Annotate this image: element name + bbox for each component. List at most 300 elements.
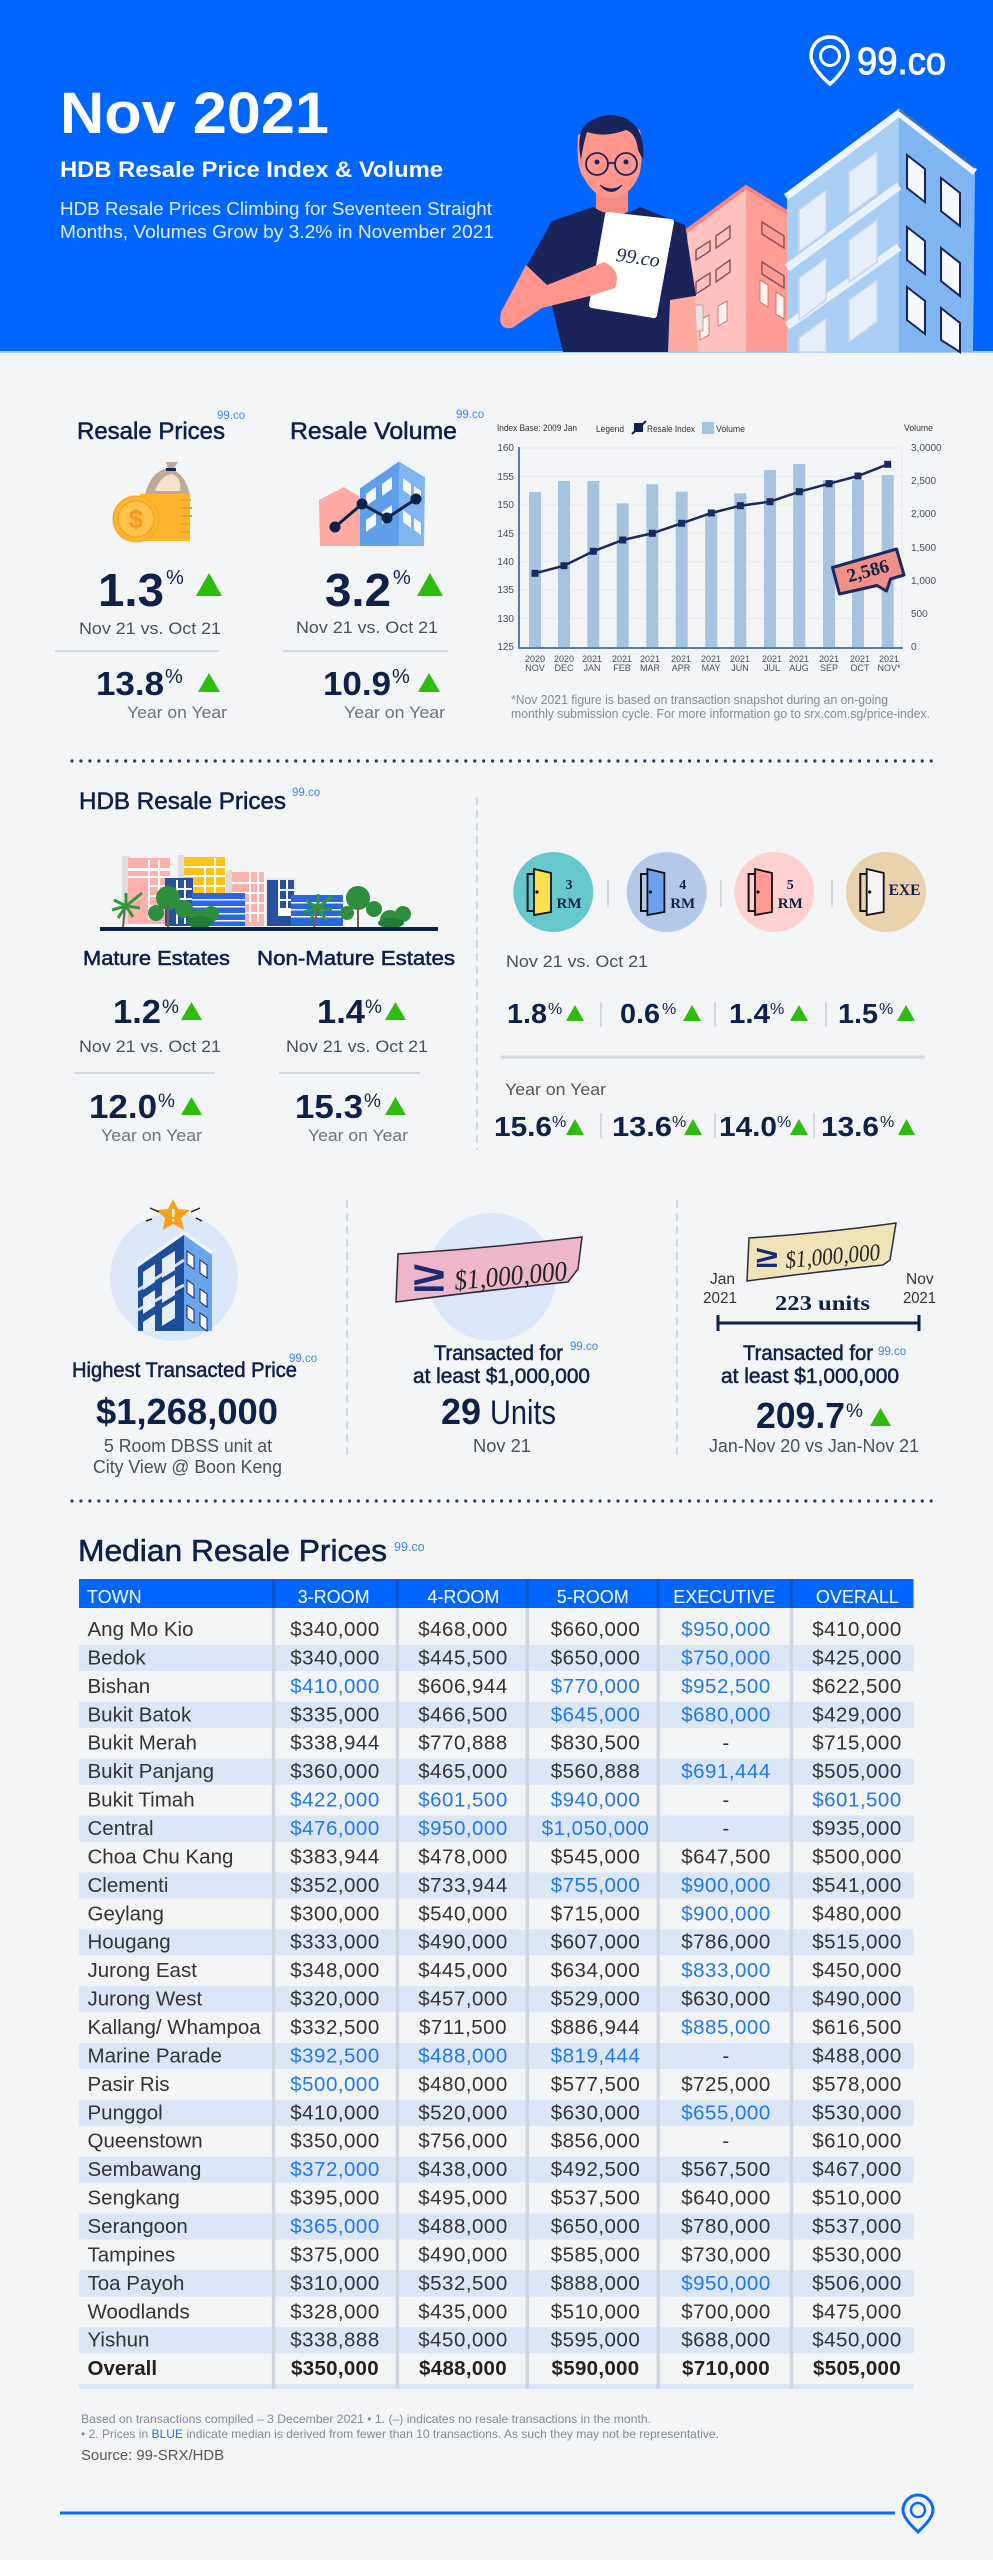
left axis labels: 130 [497, 614, 514, 625]
source: Source: 99-SRX/HDB [81, 2448, 224, 2464]
month labels: 2021 [582, 654, 602, 664]
stat: non-mature 15.3%: 15.3 [295, 1088, 363, 1125]
row: Bukit Panjang [88, 1760, 902, 1783]
row: Kallang/ Whampoa: $616,500 [812, 2016, 902, 2039]
label: 223 units: 223 units [775, 1291, 870, 1315]
row: Sengkang: $640,000 [681, 2187, 771, 2210]
stat: mature 1.2%: % [162, 997, 179, 1018]
watermark tag: 99.co [217, 410, 245, 422]
description: Months, Volumes Grow by 3.2% in November 2021 [60, 221, 494, 242]
row: Bedok: Bedok [88, 1646, 146, 1669]
row: Jurong West: $529,000 [551, 1988, 640, 2011]
panel: flat type price change [494, 852, 926, 1142]
icon: 5 room door [734, 852, 814, 932]
row: Bedok [88, 1646, 902, 1669]
icon: 4 room door: RM [670, 896, 695, 912]
row: Queenstown: Queenstown [88, 2130, 203, 2153]
heading [721, 1342, 899, 1388]
row: Geylang: $300,000 [290, 1902, 380, 1925]
left axis labels: 125 [497, 642, 514, 653]
month labels: JUN [731, 663, 749, 673]
row: Bedok: $750,000 [681, 1646, 771, 1669]
row: Hougang: $490,000 [418, 1931, 508, 1954]
row: Choa Chu Kang: $478,000 [418, 1845, 508, 1868]
row: Marine Parade: - [722, 2044, 730, 2068]
row: Overall: $350,000 [291, 2357, 379, 2380]
icon: 3 room door [513, 852, 593, 932]
row: Bishan: $770,000 [551, 1675, 640, 1698]
stats: year on year by flat type: 13.6 [821, 1111, 879, 1142]
month labels: 2021 [762, 654, 782, 664]
row: Overall: $590,000 [552, 2357, 639, 2380]
row: Bishan: $952,500 [681, 1675, 771, 1698]
row: Woodlands: $510,000 [551, 2300, 640, 2323]
month labels: NOV* [877, 663, 901, 673]
icon: 3 room door: RM [556, 896, 582, 912]
row: Serangoon: $780,000 [681, 2215, 771, 2238]
watermark tag: 99.co [292, 787, 320, 799]
row: Central: $1,050,000 [542, 1817, 649, 1840]
stat: 10.9% year on year: % [392, 666, 410, 688]
row: Ang Mo Kio: $410,000 [812, 1618, 902, 1641]
illustration: housing estate skyline [100, 855, 438, 931]
row: Yishun: $338,888 [290, 2329, 380, 2352]
chart legend [497, 421, 933, 435]
stats: year on year by flat type: % [672, 1114, 686, 1131]
description: 5 Room DBSS unit at [104, 1436, 272, 1456]
date labels: Jan [710, 1271, 735, 1288]
logo: 99.co [811, 37, 946, 84]
row: Bukit Panjang: $691,444 [681, 1760, 771, 1783]
row: Hougang: $607,000 [551, 1931, 640, 1954]
row: Clementi [88, 1874, 902, 1897]
chart: resale index and volume [497, 421, 942, 721]
row: Queenstown: $856,000 [551, 2130, 640, 2153]
row: Bedok: $445,500 [418, 1646, 508, 1669]
row: Tampines: $730,000 [681, 2244, 771, 2266]
stat: 29 units: Units [490, 1394, 556, 1432]
row: Sembawang: $438,000 [418, 2158, 508, 2181]
row: Bedok: $425,000 [812, 1646, 902, 1669]
row: Overall: $710,000 [682, 2357, 770, 2380]
table header: 3-ROOM [298, 1587, 370, 1607]
caption: Nov 21 vs. Oct 21 [286, 1037, 428, 1056]
row: Kallang/ Whampoa: $711,500 [419, 2016, 507, 2039]
row: Marine Parade: $488,000 [418, 2044, 508, 2068]
row: Geylang [88, 1902, 902, 1925]
table row bands [79, 1645, 914, 2389]
row: Choa Chu Kang: $383,944 [290, 1845, 380, 1868]
row: Toa Payoh: $888,000 [551, 2272, 640, 2295]
row: Yishun: $450,000 [812, 2329, 902, 2352]
stat: 1.3% month on month: 1.3 [98, 564, 164, 616]
table header: 5-ROOM [557, 1587, 629, 1607]
row: Queenstown: $610,000 [812, 2130, 902, 2153]
row: Overall [88, 2357, 901, 2380]
row: Ang Mo Kio: $660,000 [551, 1618, 640, 1641]
row: Woodlands: $475,000 [812, 2300, 902, 2323]
row: Geylang: $900,000 [681, 1902, 771, 1925]
month labels: 2021 [701, 654, 721, 664]
stat: non-mature 15.3% [295, 1088, 406, 1125]
subtitle: HDB Resale Price Index & Volume [60, 157, 443, 182]
row: Marine Parade: $488,000 [812, 2044, 902, 2068]
row: Yishun: Yishun [88, 2329, 149, 2352]
description: HDB Resale Prices Climbing for Seventeen Straight [60, 198, 492, 219]
footnotes: • 2. Prices in BLUE indicate median is derived from fewer than 10 transactions. As such they may not be representative. [81, 2427, 719, 2441]
callout: 2,586: 2,586 [845, 556, 891, 587]
stat: 13.8% year on year: % [165, 666, 183, 688]
stat: 209.7%: % [846, 1401, 863, 1422]
right axis labels: 2,500 [911, 476, 936, 487]
row: Geylang: $480,000 [812, 1902, 902, 1925]
row: Toa Payoh: $950,000 [681, 2272, 771, 2295]
row: Serangoon: $537,000 [812, 2215, 902, 2238]
icon: 5 room door: 5 [787, 878, 794, 893]
row: Choa Chu Kang: Choa Chu Kang [88, 1845, 233, 1868]
row: Tampines [88, 2244, 902, 2266]
right axis labels [911, 443, 942, 653]
stat: 3.2% month on month: 3.2 [325, 564, 391, 616]
caption: Nov 21 vs. Oct 21 [296, 618, 438, 637]
row: Yishun: $450,000 [418, 2329, 508, 2352]
month labels: MAY [702, 663, 720, 673]
row: Toa Payoh: Toa Payoh [88, 2272, 184, 2295]
icon: building with star [110, 1199, 238, 1341]
stats: year on year by flat type: % [777, 1114, 791, 1131]
stat: mature 1.2%: 1.2 [113, 993, 161, 1030]
row: Bishan: $606,944 [418, 1675, 508, 1698]
row: Bukit Batok [88, 1703, 902, 1726]
row: Punggol: $530,000 [812, 2101, 902, 2124]
row: Clementi: $733,944 [418, 1874, 508, 1897]
chart footnote: *Nov 2021 figure is based on transaction snapshot during an on-going [511, 693, 888, 707]
stats: month on month by flat type: % [548, 1001, 562, 1018]
row: Bukit Panjang: $360,000 [290, 1760, 380, 1783]
row: Bukit Timah: - [722, 1789, 730, 1812]
row: Clementi: $541,000 [812, 1874, 902, 1897]
row: Bukit Batok: $466,500 [418, 1703, 508, 1726]
date labels: Nov [906, 1271, 934, 1288]
row: Geylang: Geylang [88, 1902, 164, 1925]
left axis labels: 135 [497, 585, 514, 596]
icon: 4 room door [627, 852, 707, 932]
row: Jurong East: Jurong East [88, 1959, 197, 1982]
row: Serangoon: $488,000 [418, 2215, 508, 2238]
caption: Nov 21 vs. Oct 21 [506, 952, 648, 971]
row: Clementi: Clementi [88, 1874, 168, 1897]
stats: year on year by flat type: % [552, 1114, 566, 1131]
chart footnote [511, 693, 930, 721]
stat: 3.2% month on month [325, 564, 443, 616]
row: Bukit Merah [88, 1732, 902, 1755]
stats: year on year by flat type: 15.6 [494, 1111, 552, 1142]
row: Hougang: $333,000 [290, 1931, 380, 1954]
stat: 209.7% [756, 1395, 891, 1436]
heading: Median Resale Prices [78, 1533, 387, 1568]
label: non-mature estates: Non-Mature Estates [257, 948, 455, 970]
header banner [0, 0, 993, 353]
right axis labels: 3,0000 [911, 443, 942, 454]
row: Ang Mo Kio [88, 1618, 902, 1641]
table header: 4-ROOM [427, 1587, 499, 1607]
icon: executive door: EXE [889, 882, 920, 899]
title: Nov 2021 [60, 81, 329, 146]
row: Jurong East: $634,000 [551, 1959, 640, 1982]
row: Kallang/ Whampoa [88, 2016, 902, 2039]
row: Sengkang: $537,500 [551, 2187, 640, 2210]
row: Jurong East [88, 1959, 902, 1982]
row: Jurong West: $457,000 [418, 1988, 508, 2011]
stat: 13.8% year on year [96, 665, 220, 702]
date labels: 2021 [903, 1290, 936, 1307]
footnotes: Based on transactions compiled – 3 December 2021 • 1. (–) indicates no resale transactions in the month. [81, 2412, 651, 2426]
row: Bishan: Bishan [88, 1675, 150, 1698]
description: City View @ Boon Keng [93, 1457, 282, 1477]
watermark tag: 99.co [456, 409, 484, 421]
panel: highest transacted price [72, 1199, 317, 1477]
right axis labels: 1,000 [911, 576, 936, 587]
month labels: 2021 [879, 654, 899, 664]
row: Woodlands: $435,000 [418, 2300, 508, 2323]
row: Jurong West [88, 1988, 902, 2011]
row: Central: $950,000 [418, 1817, 508, 1840]
right axis labels: 1,500 [911, 543, 936, 554]
label: mature estates: Mature Estates [83, 948, 230, 970]
stats: month on month by flat type [507, 998, 915, 1029]
heading: Transacted for [743, 1342, 873, 1365]
row: Bukit Merah: $715,000 [812, 1732, 902, 1755]
row: Serangoon [88, 2215, 902, 2238]
row: Jurong East: $833,000 [681, 1959, 771, 1982]
stats: month on month by flat type: % [770, 1001, 784, 1018]
row: Ang Mo Kio: $950,000 [681, 1618, 771, 1641]
row: Yishun [88, 2329, 902, 2352]
stat: non-mature 1.4% [317, 993, 406, 1030]
chart footnote: monthly submission cycle. For more information go to srx.com.sg/price-index. [511, 707, 930, 721]
icon: pink price banner: ≥ [413, 1253, 445, 1300]
month labels: DEC [554, 663, 574, 673]
month labels: JUL [764, 663, 780, 673]
row: Jurong West: $320,000 [290, 1988, 380, 2011]
date labels [703, 1271, 936, 1307]
row: Bukit Batok: $335,000 [290, 1703, 380, 1726]
row: Bishan: $622,500 [812, 1675, 902, 1698]
row: Sengkang: $510,000 [812, 2187, 902, 2210]
caption: Year on Year [127, 703, 227, 722]
stat: 209.7%: 209.7 [756, 1395, 845, 1436]
illustration: man holding tablet: 99.co [615, 244, 661, 272]
row: Overall: $488,000 [419, 2357, 507, 2380]
row: Woodlands [88, 2300, 902, 2323]
row: Kallang/ Whampoa: $886,944 [551, 2016, 640, 2039]
row: Punggol [88, 2101, 902, 2124]
heading: Transacted for [434, 1342, 563, 1365]
illustration: pink building [685, 187, 790, 352]
row: Sembawang: Sembawang [88, 2158, 201, 2181]
row: Yishun: $688,000 [681, 2329, 771, 2352]
stat: 29 units: 29 [441, 1391, 481, 1432]
heading: HDB Resale Prices [79, 788, 286, 815]
stats: month on month by flat type: 1.5 [838, 998, 878, 1029]
icon: yellow price banner: $1,000,000 [784, 1240, 881, 1274]
row: Clementi: $352,000 [290, 1874, 380, 1897]
left axis labels: 155 [497, 472, 514, 483]
stats: year on year by flat type [494, 1111, 915, 1142]
stat: mature 1.2% [113, 993, 202, 1030]
right axis labels: 500 [911, 609, 928, 620]
row: Overall: $505,000 [813, 2357, 901, 2380]
caption: Year on Year [101, 1126, 202, 1145]
row: Pasir Ris: Pasir Ris [88, 2073, 170, 2096]
row: Pasir Ris: $500,000 [290, 2073, 380, 2096]
row: Pasir Ris: $725,000 [681, 2073, 771, 2096]
stat: 10.9% year on year: 10.9 [323, 665, 391, 702]
row: Jurong West: Jurong West [88, 1988, 203, 2011]
row: Jurong West: $630,000 [681, 1988, 771, 2011]
stat: mature 12.0% [89, 1088, 202, 1125]
row: Sengkang [88, 2187, 902, 2210]
row: Marine Parade: $392,500 [290, 2044, 380, 2068]
month labels: AUG [789, 663, 809, 673]
row: Geylang: $540,000 [418, 1902, 508, 1925]
row: Clementi: $900,000 [681, 1874, 771, 1897]
caption: Year on Year [308, 1126, 408, 1145]
row: Choa Chu Kang: $647,500 [681, 1845, 771, 1868]
row: Kallang/ Whampoa: $885,000 [681, 2016, 771, 2039]
footnotes [81, 2412, 719, 2441]
row: Hougang [88, 1931, 902, 1954]
row: Sembawang: $492,500 [551, 2158, 640, 2181]
row: Punggol: $655,000 [681, 2101, 771, 2124]
row: Punggol: Punggol [88, 2101, 163, 2124]
row: Bukit Panjang: $465,000 [418, 1760, 508, 1783]
row: Pasir Ris [88, 2073, 902, 2096]
date labels: 2021 [703, 1290, 737, 1307]
row: Punggol: $410,000 [290, 2101, 380, 2124]
chart legend: Volume [716, 424, 745, 435]
volume bars [529, 464, 894, 647]
row: Queenstown: $350,000 [290, 2130, 380, 2153]
table header: TOWN [87, 1587, 142, 1607]
row: Yishun: $595,000 [551, 2329, 640, 2352]
row: Punggol: $520,000 [418, 2101, 508, 2124]
icon: 4 room door: 4 [679, 878, 686, 893]
row: Kallang/ Whampoa: $332,500 [290, 2016, 380, 2039]
row: Choa Chu Kang: $500,000 [812, 1845, 902, 1868]
icon: pink price banner: $1,000,000 [453, 1256, 568, 1297]
stat: non-mature 1.4%: 1.4 [317, 993, 366, 1030]
icon: money bag and coins: $ [129, 504, 144, 534]
left axis labels: 140 [497, 557, 514, 568]
month labels: OCT [850, 663, 870, 673]
left axis labels: 150 [497, 500, 514, 511]
row: Pasir Ris: $578,000 [812, 2073, 902, 2096]
stats: month on month by flat type: 1.4 [729, 998, 770, 1029]
row: Central: - [722, 1817, 730, 1840]
row: Serangoon: $650,000 [551, 2215, 640, 2238]
row: Bukit Merah: $770,888 [418, 1732, 508, 1755]
row: Central: Central [88, 1817, 154, 1840]
heading: at least $1,000,000 [721, 1365, 899, 1388]
timeline bracket [718, 1315, 919, 1331]
row: Sengkang: Sengkang [88, 2187, 180, 2210]
row: Bishan: $410,000 [290, 1675, 380, 1698]
callout: 2,586 [832, 549, 904, 594]
row: Bedok: $650,000 [551, 1646, 640, 1669]
row: Bukit Timah: $422,000 [290, 1789, 380, 1812]
price: $1,268,000 [96, 1391, 278, 1432]
row: Central: $476,000 [290, 1817, 380, 1840]
month labels: 2021 [819, 654, 839, 664]
row: Bukit Panjang: Bukit Panjang [88, 1760, 214, 1783]
row: Queenstown: - [722, 2130, 730, 2153]
row: Tampines: $585,000 [551, 2244, 640, 2266]
heading: Highest Transacted Price [72, 1359, 297, 1382]
chart legend: Volume [904, 423, 933, 434]
icon: yellow price banner [747, 1223, 896, 1281]
month labels: 2021 [850, 654, 870, 664]
footer rule and logo pin [60, 2495, 933, 2532]
stats: month on month by flat type: % [662, 1001, 676, 1018]
chart legend: Legend [596, 424, 624, 435]
illustration: man holding tablet [500, 115, 698, 352]
row: Pasir Ris: $577,500 [551, 2073, 640, 2096]
heading: resale prices: Resale Prices [77, 418, 225, 445]
stat: 13.8% year on year: 13.8 [96, 665, 164, 702]
row: Jurong East: $348,000 [290, 1959, 380, 1982]
caption: Nov 21 vs. Oct 21 [79, 619, 221, 638]
row: Clementi: $755,000 [551, 1874, 640, 1897]
row: Bukit Timah: $940,000 [551, 1789, 640, 1812]
heading [413, 1342, 590, 1388]
resale index line [532, 461, 891, 577]
row: Queenstown: $756,000 [418, 2130, 508, 2153]
left axis labels [497, 443, 514, 653]
row: Choa Chu Kang: $545,000 [551, 1845, 640, 1868]
row: Bishan [88, 1675, 902, 1698]
row: Toa Payoh: $310,000 [290, 2272, 380, 2295]
row: Tampines: $375,000 [290, 2244, 380, 2266]
row: Hougang: Hougang [88, 1931, 171, 1954]
row: Woodlands: $700,000 [681, 2300, 771, 2323]
stat: mature 12.0%: 12.0 [89, 1088, 157, 1125]
caption: Nov 21 [473, 1436, 531, 1456]
row: Tampines: $530,000 [812, 2244, 902, 2266]
description [93, 1436, 282, 1477]
month labels: 2021 [640, 654, 660, 664]
row: Hougang: $515,000 [812, 1931, 902, 1954]
row: Sembawang [88, 2158, 902, 2181]
icon: buildings with trend line [319, 460, 425, 546]
row: Toa Payoh: $506,000 [812, 2272, 902, 2295]
row: Toa Payoh: $532,500 [418, 2272, 508, 2295]
row: Sembawang: $467,000 [812, 2158, 902, 2181]
row: Central [88, 1817, 902, 1840]
caption: Year on Year [344, 703, 445, 722]
icon: 3 room door: 3 [566, 878, 572, 893]
month labels: FEB [613, 663, 631, 673]
row: Ang Mo Kio: Ang Mo Kio [88, 1618, 193, 1641]
watermark tag: 99.co [878, 1346, 906, 1358]
stat: non-mature 15.3%: % [364, 1091, 381, 1112]
stats: month on month by flat type: 0.6 [620, 998, 660, 1029]
row: Sengkang: $395,000 [290, 2187, 380, 2210]
panel: resale prices [55, 410, 245, 722]
row: Tampines: $490,000 [418, 2244, 508, 2266]
row: Bukit Merah: Bukit Merah [88, 1732, 197, 1755]
table header: OVERALL [816, 1587, 899, 1607]
